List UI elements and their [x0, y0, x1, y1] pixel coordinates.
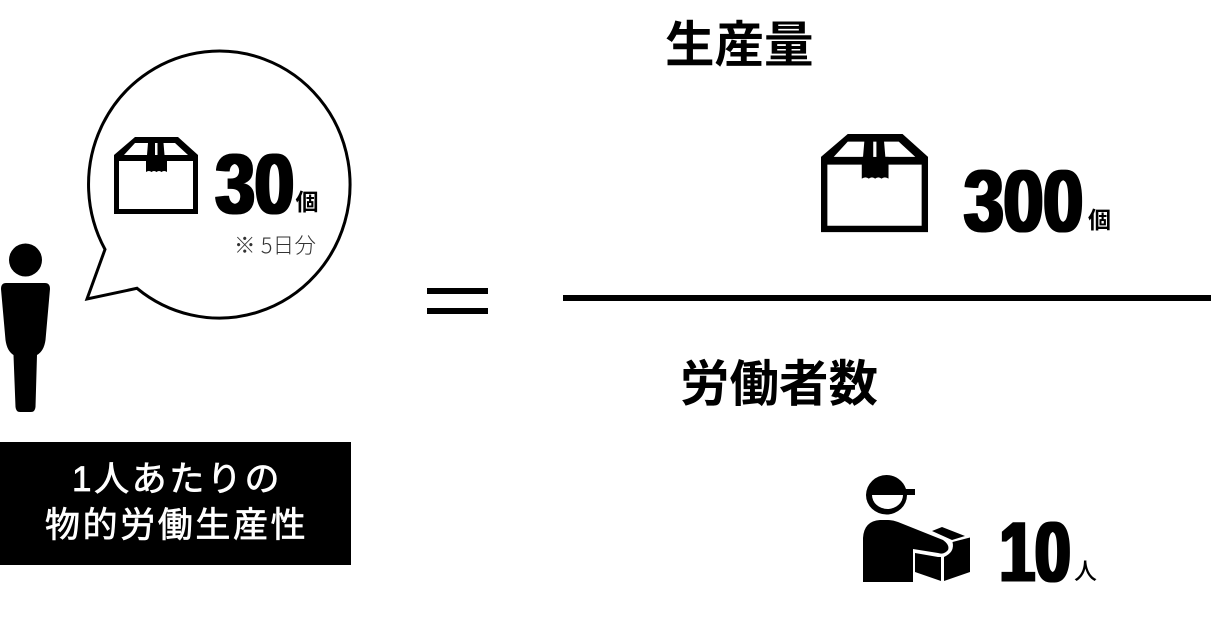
- value: 10 people: 人: [1074, 558, 1097, 584]
- value: 10 people: 10: [1000, 504, 1071, 599]
- value: 300 pieces: 個: [1088, 207, 1111, 233]
- icon: delivery worker with parcel: [863, 475, 970, 582]
- value: 30 pieces: 個: [296, 189, 318, 215]
- value: 300 pieces: 300: [964, 152, 1083, 250]
- equals sign: [427, 288, 488, 314]
- value: 30 pieces: 30: [216, 138, 294, 231]
- label box: labour productivity per person: 1人あたりの: [72, 460, 282, 499]
- label box: labour productivity per person: [0, 442, 351, 565]
- heading: production volume: 生産量: [665, 18, 814, 73]
- icon: cardboard box small: [114, 137, 198, 214]
- icon: cardboard box large: [821, 134, 928, 232]
- fraction line: [563, 295, 1211, 301]
- note: five days: ※ 5日分: [234, 229, 316, 260]
- speech bubble: [87, 51, 350, 318]
- icon: person silhouette: [1, 244, 50, 412]
- label box: labour productivity per person: 物的労働生産性: [45, 506, 308, 545]
- heading: number of workers: 労働者数: [680, 357, 878, 412]
